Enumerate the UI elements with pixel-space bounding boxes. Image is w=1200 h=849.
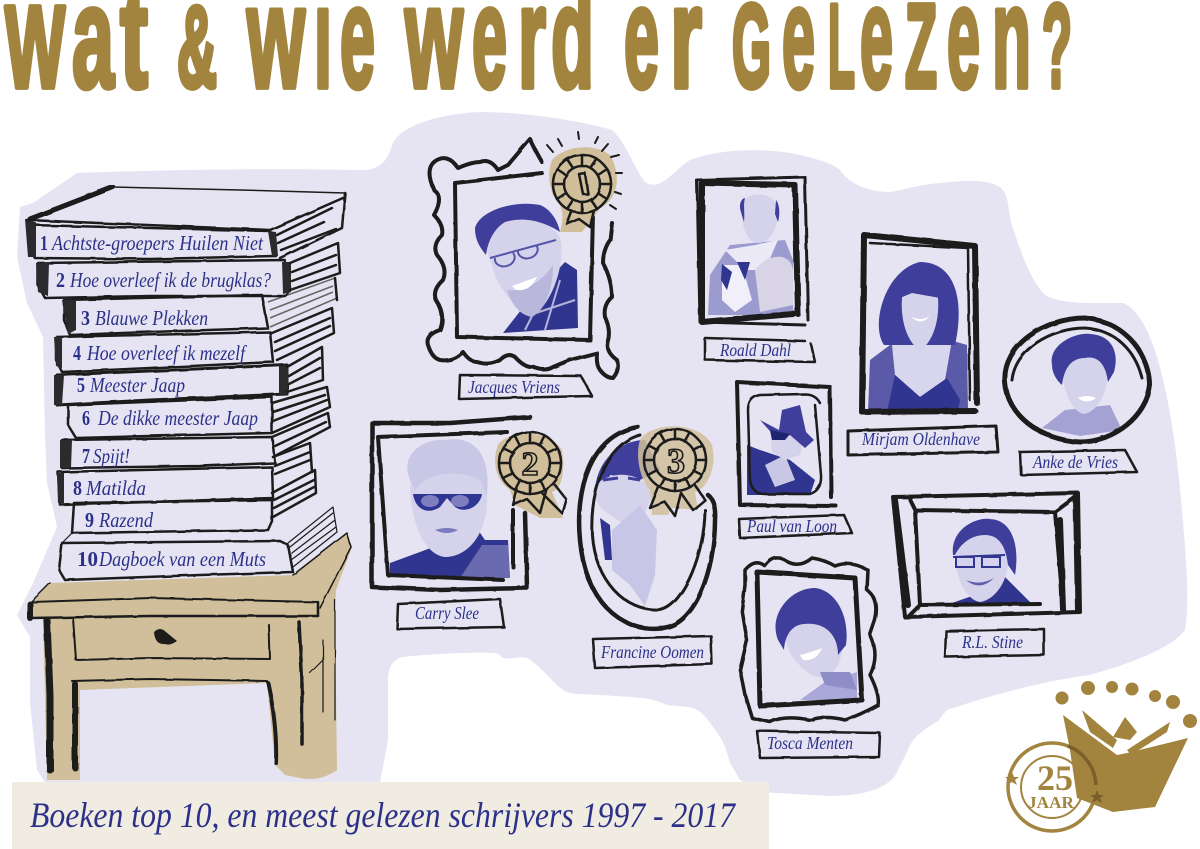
book 9 xyxy=(72,500,272,533)
name label xyxy=(848,426,998,455)
icon: open book with crown xyxy=(1056,681,1197,812)
name label: R.L. Stine xyxy=(961,632,1023,652)
book 8 xyxy=(57,467,316,517)
book 6 xyxy=(68,387,330,457)
book 7: 7 xyxy=(82,444,90,468)
book 1: 1 xyxy=(40,231,48,255)
name label: Anke de Vries xyxy=(1032,452,1118,472)
frame xyxy=(697,177,808,325)
rank medal 3 xyxy=(638,426,714,516)
name label xyxy=(1020,450,1137,475)
stamp: JAAR xyxy=(1028,793,1075,812)
name label xyxy=(593,636,712,668)
name label: Mirjam Oldenhave xyxy=(861,429,980,449)
frame xyxy=(893,493,1080,617)
book 8: 8 xyxy=(73,476,82,500)
name label: Jacques Vriens xyxy=(468,377,560,397)
book 5: 5 xyxy=(77,373,85,397)
name label xyxy=(459,375,592,399)
name label: Tosca Menten xyxy=(767,733,853,753)
portrait: Carry Slee xyxy=(372,417,566,629)
book 10: 10 xyxy=(77,547,98,571)
portrait: Anke de Vries xyxy=(1005,318,1150,475)
rank medal 3: 3 xyxy=(667,441,685,481)
stamp: 25 xyxy=(1037,758,1073,798)
book 3 xyxy=(62,278,337,335)
portrait: Paul van Loon xyxy=(737,382,852,538)
book 6: 6 xyxy=(82,406,90,430)
frame xyxy=(862,235,977,412)
frame xyxy=(428,139,618,378)
book 4 xyxy=(54,308,334,372)
photo xyxy=(868,262,968,412)
name label: Paul van Loon xyxy=(746,516,837,536)
table xyxy=(30,533,352,780)
book 5 xyxy=(54,347,323,405)
book 10 xyxy=(59,507,337,580)
rank medal 1 xyxy=(547,132,622,232)
book 2: 2 xyxy=(56,268,65,292)
frame xyxy=(579,427,715,628)
name label xyxy=(945,629,1044,657)
photo xyxy=(776,588,857,700)
book 7 xyxy=(60,437,312,474)
book stack xyxy=(25,187,345,580)
rank medal 2 xyxy=(495,432,566,518)
rank medal 2: 2 xyxy=(522,446,538,483)
portrait: Francine Oomen xyxy=(579,426,715,668)
book 4: Hoe overleef ik mezelf xyxy=(86,341,248,365)
frame xyxy=(737,382,836,506)
photo xyxy=(747,405,815,495)
logo: 25 jaar xyxy=(1005,681,1197,831)
portrait: Tosca Menten xyxy=(740,558,880,758)
name label xyxy=(397,599,504,629)
book 1: Achtste-groepers Huilen Niet xyxy=(50,231,264,255)
book 8: Matilda xyxy=(85,476,146,500)
book 7: Spijt! xyxy=(93,444,130,468)
background blob xyxy=(17,112,1187,796)
book 6: De dikke meester Jaap xyxy=(97,406,258,430)
subtitle banner: Boeken top 10, en meest gelezen schrijvers 1997 - 2017 xyxy=(30,795,737,835)
name label xyxy=(757,731,880,758)
portrait: Roald Dahl xyxy=(697,177,815,362)
name label: Francine Oomen xyxy=(600,642,704,662)
portrait: Mirjam Oldenhave xyxy=(848,235,998,455)
book 3: Blauwe Plekken xyxy=(95,306,208,330)
icon: drawer knob xyxy=(154,629,177,645)
name label xyxy=(705,338,815,362)
book 5: Meester Jaap xyxy=(89,373,185,397)
book 2: Hoe overleef ik de brugklas? xyxy=(69,268,271,292)
photo xyxy=(475,204,578,333)
portrait: Jacques Vriens xyxy=(428,132,622,399)
book 4: 4 xyxy=(73,341,81,365)
subtitle banner xyxy=(12,782,769,849)
frame xyxy=(372,417,530,590)
portrait: R.L. Stine xyxy=(893,493,1080,657)
book 3: 3 xyxy=(81,306,90,330)
book 9: 9 xyxy=(85,508,94,532)
photo xyxy=(708,194,793,315)
book 2 xyxy=(36,243,340,300)
name label: Roald Dahl xyxy=(719,340,791,360)
stamp xyxy=(1005,743,1104,831)
frame xyxy=(1005,318,1150,442)
book 9: Razend xyxy=(98,508,153,532)
photo xyxy=(952,519,1031,603)
name label: Carry Slee xyxy=(415,603,479,623)
photo xyxy=(594,440,660,606)
photo xyxy=(390,439,510,578)
book 1 xyxy=(25,187,345,259)
photo xyxy=(1042,334,1122,436)
book 10: Dagboek van een Muts xyxy=(98,547,266,571)
frame xyxy=(740,558,878,722)
